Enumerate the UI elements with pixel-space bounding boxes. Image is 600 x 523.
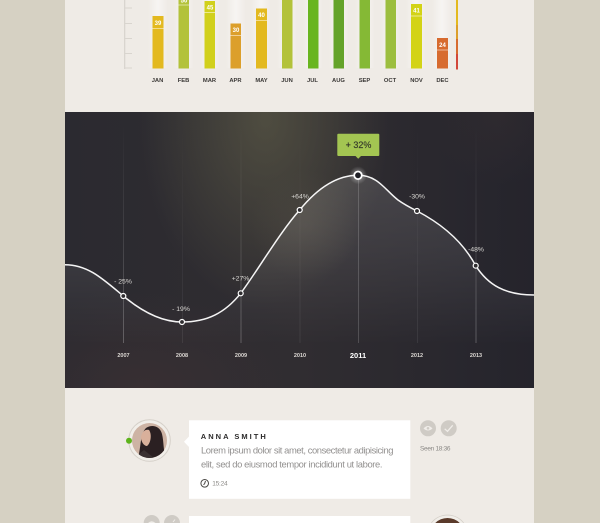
bar: Jan 39 <box>152 16 164 68</box>
year guide lines <box>123 125 476 343</box>
bar: Jun <box>282 0 292 68</box>
month labels: AUG <box>332 78 345 84</box>
icon: clock <box>201 480 208 487</box>
year labels: 2009 <box>235 353 247 359</box>
glow at peak <box>349 166 367 184</box>
bar: Mar 45 <box>204 1 215 68</box>
bar: Nov 41: 41 <box>413 8 420 14</box>
bar: May 40: 40 <box>258 13 265 19</box>
bar: Feb 50 <box>178 0 189 68</box>
year labels: 2012 <box>411 353 423 359</box>
icon: check <box>441 420 457 436</box>
area under curve <box>65 175 534 345</box>
sender name: ANNA SMITH <box>201 432 266 441</box>
month labels: SEP <box>359 78 370 84</box>
callout: +32%: + 32% <box>346 140 371 150</box>
bar: Dec 24 <box>437 38 448 68</box>
page column <box>65 0 534 523</box>
bar: Aug <box>334 0 344 68</box>
chart axis <box>124 0 132 69</box>
message bubble <box>189 516 410 523</box>
message: Anna Smith <box>126 420 457 499</box>
message text: elit, sed do eiusmod tempor incididunt ut labore. <box>201 458 382 469</box>
bar: Sep <box>360 0 370 68</box>
icon: seen eye <box>144 515 160 523</box>
colour scale strip <box>456 0 458 70</box>
year labels: 2011 <box>350 351 366 360</box>
month labels: OCT <box>384 78 397 84</box>
panel: dark line chart <box>65 112 534 388</box>
bar: Nov 41 <box>411 4 422 68</box>
message: second row <box>144 515 464 523</box>
year labels: 2007 <box>117 353 130 359</box>
message text <box>201 444 394 469</box>
bar: Apr 30: 30 <box>233 28 240 34</box>
value labels <box>114 194 484 313</box>
bar: Jul <box>308 0 318 68</box>
month labels: DEC <box>436 78 449 84</box>
year labels: 2010 <box>294 353 306 359</box>
message text: Lorem ipsum dolor sit amet, consectetur adipisicing <box>201 444 394 455</box>
data points <box>121 208 478 324</box>
month labels: FEB <box>178 78 189 84</box>
bar: Apr 30 <box>230 24 241 68</box>
month labels: JUN <box>281 78 293 84</box>
bar: Mar 45: 45 <box>207 6 214 12</box>
month labels: JUL <box>307 78 318 84</box>
icon: seen eye <box>420 420 436 436</box>
month labels: MAY <box>255 78 268 84</box>
value labels: +27% <box>232 276 249 282</box>
month labels <box>152 78 449 84</box>
month labels: JAN <box>152 78 163 84</box>
year labels: 2008 <box>176 353 188 359</box>
avatar <box>431 515 464 523</box>
avatar <box>126 420 170 461</box>
year labels: 2013 <box>470 353 482 359</box>
bar: Oct <box>386 0 396 68</box>
month labels: MAR <box>203 78 217 84</box>
value labels: -30% <box>409 194 425 200</box>
bar: May 40 <box>256 8 267 68</box>
month labels: APR <box>229 78 242 84</box>
value labels: +64% <box>291 194 309 200</box>
value labels: - 25% <box>114 278 132 286</box>
bar: Dec 24: 24 <box>439 43 446 49</box>
message bubble <box>184 420 410 499</box>
value labels: - 19% <box>172 306 190 313</box>
bar chart <box>124 0 458 84</box>
month labels: NOV <box>410 78 423 84</box>
peak point <box>354 172 362 179</box>
line curve <box>65 175 534 322</box>
callout: +32% <box>337 134 379 159</box>
value labels: -48% <box>468 246 484 254</box>
bar: Jan 39: 39 <box>155 21 162 27</box>
seen label: Seen 18:36 <box>420 445 451 452</box>
icon: check <box>164 515 180 523</box>
year labels <box>117 351 482 360</box>
timestamp: 15:24 <box>212 480 228 488</box>
